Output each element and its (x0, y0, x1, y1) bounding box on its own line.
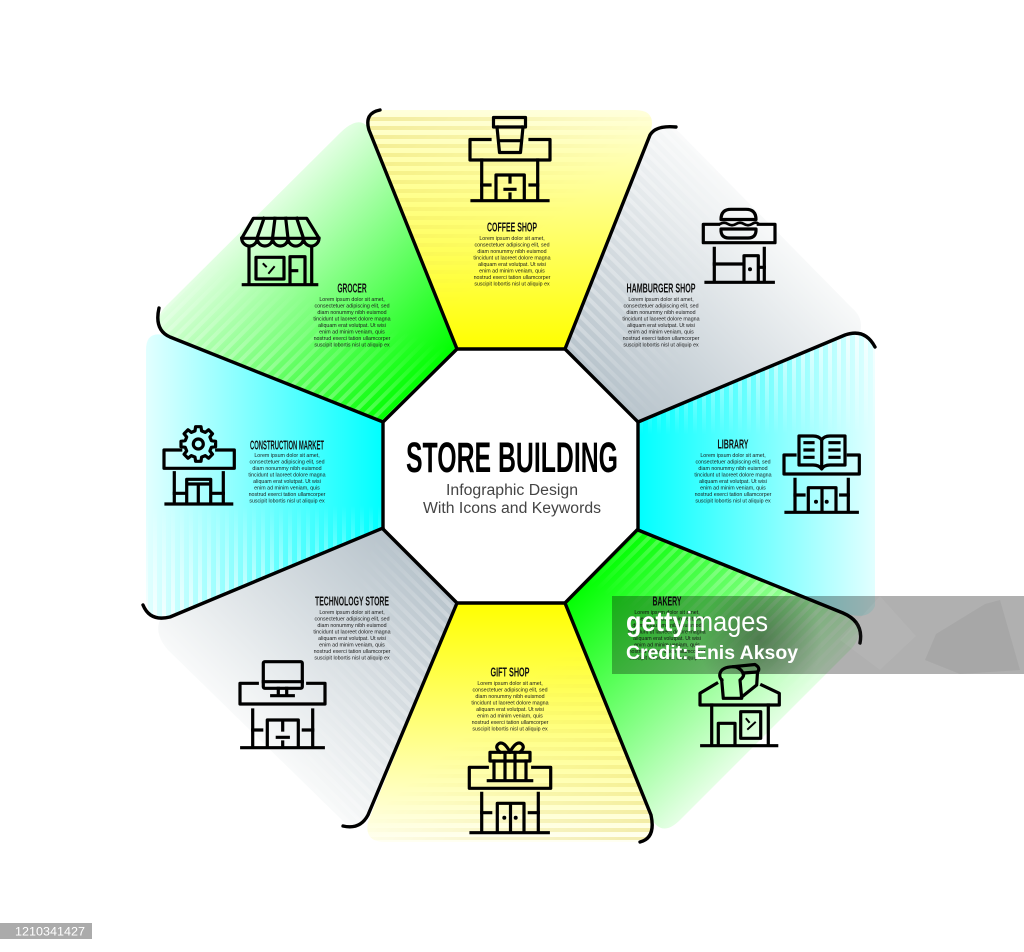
text block: coffee shop: diam nonummy nibh euismod (477, 249, 547, 255)
text block: construction market: diam nonummy nibh euismod (252, 466, 322, 472)
text block: construction market: consectetuer adipiscing elit, sed (249, 460, 325, 466)
text block: hamburger shop: enim ad minim veniam, quis (628, 330, 694, 336)
text block: technology store: aliquam erat volutpat. Ut wisi (318, 636, 386, 642)
text block: hamburger shop: aliquam erat volutpat. Ut wisi (627, 323, 695, 329)
heading: grocer: GROCER (337, 282, 367, 296)
text block: technology store: diam nonummy nibh euismod (317, 623, 387, 629)
text block: gift shop (471, 681, 549, 732)
watermark banner (612, 596, 1024, 674)
text block: bakery: consectetuer adipiscing elit, sed (629, 616, 705, 622)
image id tag: 1210341427 (15, 926, 85, 938)
text block: library (694, 453, 772, 504)
text block: library: nostrud exerci tation ullamcorper (695, 492, 772, 498)
text block: bakery: Lorem ipsum dolor sit amet, (634, 610, 700, 616)
text block: gift shop: aliquam erat volutpat. Ut wisi (476, 707, 544, 713)
text block: grocer (313, 297, 391, 348)
heading: gift shop: GIFT SHOP (490, 666, 530, 680)
text block: coffee shop: enim ad minim veniam, quis (479, 268, 545, 274)
text block: technology store: suscipit lobortis nisl ut aliquip ex (314, 656, 390, 662)
text block: coffee shop (473, 236, 551, 288)
panel: construction market: CONSTRUCTION MARKET (250, 438, 324, 452)
text block: coffee shop: tincidunt ut laoreet dolore magna (473, 256, 551, 262)
octagon outline and dividers (143, 110, 875, 842)
icon: library (784, 436, 859, 512)
text block: grocer: enim ad minim veniam, quis (319, 330, 385, 336)
heading: bakery: BAKERY (652, 594, 682, 608)
icon: grocer (242, 218, 319, 285)
text block: hamburger shop: consectetuer adipiscing elit, sed (623, 304, 699, 310)
text block: technology store: enim ad minim veniam, quis (319, 642, 385, 648)
text block: grocer: nostrud exerci tation ullamcorper (314, 336, 391, 342)
icon: coffee shop (470, 118, 550, 201)
heading: library: LIBRARY (718, 438, 749, 452)
text block: bakery: aliquam erat volutpat. Ut wisi (633, 636, 701, 642)
icon: construction market (164, 427, 234, 504)
icon: gift shop (469, 743, 551, 833)
panel: coffee shop (360, 110, 660, 353)
text block: construction market: enim ad minim veniam, quis (254, 486, 320, 492)
text block: gift shop: suscipit lobortis nisl ut aliquip ex (472, 726, 548, 732)
text block: gift shop: enim ad minim veniam, quis (477, 714, 543, 720)
text block: grocer: diam nonummy nibh euismod (317, 310, 387, 316)
text block: technology store: tincidunt ut laoreet dolore magna (313, 630, 391, 636)
text block: hamburger shop: diam nonummy nibh euismod (626, 310, 696, 316)
text block: grocer: consectetuer adipiscing elit, sed (314, 304, 390, 310)
text block: construction market (248, 453, 326, 504)
text block: technology store (313, 610, 391, 662)
panel: bakery (560, 525, 870, 835)
text block: construction market: Lorem ipsum dolor sit amet, (254, 453, 320, 459)
text block: library: suscipit lobortis nisl ut aliquip ex (695, 498, 771, 504)
text block: library: consectetuer adipiscing elit, sed (695, 460, 771, 466)
text block: gift shop: nostrud exerci tation ullamcorper (472, 720, 549, 726)
icon: hamburger shop (703, 209, 775, 282)
heading: store building: STORE BUILDING (406, 434, 618, 482)
heading: technology store: TECHNOLOGY STORE (315, 594, 389, 608)
subtitle line 1: Infographic Design (446, 482, 578, 499)
text block: hamburger shop: nostrud exerci tation ullamcorper (623, 336, 700, 342)
text block: construction market: suscipit lobortis nisl ut aliquip ex (249, 498, 325, 504)
text block: coffee shop: nostrud exerci tation ullamcorper (474, 275, 551, 281)
text block: construction market: tincidunt ut laoreet dolore magna (248, 472, 326, 478)
text block: library: Lorem ipsum dolor sit amet, (700, 453, 766, 459)
text block: gift shop: diam nonummy nibh euismod (475, 694, 545, 700)
text block: hamburger shop: suscipit lobortis nisl ut aliquip ex (623, 342, 699, 348)
subtitle line 2: With Icons and Keywords (423, 500, 601, 517)
text block: coffee shop: suscipit lobortis nisl ut aliquip ex (474, 282, 550, 288)
panel: technology store (150, 525, 460, 835)
text block: coffee shop: aliquam erat volutpat. Ut wisi (478, 262, 546, 268)
heading: coffee shop: COFFEE SHOP (487, 220, 537, 234)
panel: library (630, 330, 880, 616)
text block: coffee shop: Lorem ipsum dolor sit amet, (479, 236, 545, 242)
heading: hamburger shop: HAMBURGER SHOP (626, 282, 696, 296)
panel: construction market (140, 334, 390, 625)
text block: construction market: nostrud exerci tation ullamcorper (249, 492, 326, 498)
text block: grocer: tincidunt ut laoreet dolore magna (313, 316, 391, 322)
text block: grocer: suscipit lobortis nisl ut aliquip ex (314, 342, 390, 348)
text block: bakery (628, 610, 706, 662)
text block: hamburger shop: Lorem ipsum dolor sit amet, (628, 297, 694, 303)
text block: technology store: nostrud exerci tation ullamcorper (314, 649, 391, 655)
text block: construction market: aliquam erat volutpat. Ut wisi (253, 479, 321, 485)
text block: gift shop: Lorem ipsum dolor sit amet, (477, 681, 543, 687)
text block: library: tincidunt ut laoreet dolore magna (694, 472, 772, 478)
text block: bakery: tincidunt ut laoreet dolore magna (628, 630, 706, 636)
text block: library: diam nonummy nibh euismod (698, 466, 768, 472)
text block: hamburger shop (622, 297, 700, 348)
text block: bakery: diam nonummy nibh euismod (632, 623, 702, 629)
panel: hamburger shop (560, 120, 870, 430)
text block: coffee shop: consectetuer adipiscing elit, sed (474, 242, 550, 248)
icon: technology store (240, 662, 325, 748)
text block: gift shop: tincidunt ut laoreet dolore magna (471, 700, 549, 706)
text block: grocer: Lorem ipsum dolor sit amet, (319, 297, 385, 303)
text block: bakery: nostrud exerci tation ullamcorper (629, 649, 706, 655)
icon: bakery (700, 664, 779, 746)
text block: hamburger shop: tincidunt ut laoreet dolore magna (622, 316, 700, 322)
panel: gift shop (360, 600, 660, 842)
text block: technology store: Lorem ipsum dolor sit amet, (319, 610, 385, 616)
text block: grocer: aliquam erat volutpat. Ut wisi (318, 323, 386, 329)
text block: technology store: consectetuer adipiscing elit, sed (314, 616, 390, 622)
text block: library: enim ad minim veniam, quis (700, 486, 766, 492)
watermark credit: Credit: Enis Aksoy (626, 643, 798, 664)
text block: library: aliquam erat volutpat. Ut wisi (699, 479, 767, 485)
image id tag (0, 923, 92, 939)
watermark logo: gettyimages (626, 606, 768, 637)
panel: grocer (150, 115, 460, 425)
central title (406, 434, 618, 517)
text block: bakery: suscipit lobortis nisl ut aliquip ex (629, 656, 705, 662)
text block: bakery: enim ad minim veniam, quis (634, 642, 700, 648)
text block: gift shop: consectetuer adipiscing elit, sed (472, 688, 548, 694)
